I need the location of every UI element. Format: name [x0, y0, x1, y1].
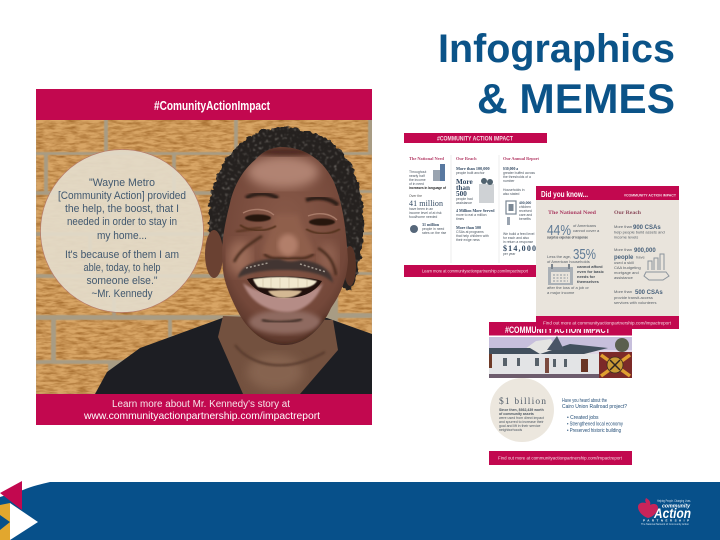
footer: Find out more at communityactionpartnership.com/impactreport: [543, 320, 672, 326]
quote circle: needed in order to stay in: [67, 216, 177, 228]
column: Our Reach: 900 CSAs: [633, 225, 661, 231]
column: The National Need: 35%: [573, 246, 596, 263]
header: [489, 322, 632, 336]
title: Infographics & MEMES: [438, 27, 675, 122]
column: The National Need: people in need: [422, 227, 444, 231]
icon: red apple mark: [638, 498, 658, 518]
column: The National Need: Less the age,: [547, 254, 571, 259]
column: The National Need: rates on the rise: [422, 231, 446, 235]
icon: small scale: [410, 225, 418, 233]
callout text: • Preserved historic building: [567, 428, 621, 434]
column: Our Reach: More than 500: [456, 225, 481, 230]
column: The National Need: of American households: [547, 259, 590, 264]
icon: corner triangles: [0, 481, 38, 540]
logo: Community Action Partnership: PARTNERSHIP: [643, 518, 689, 522]
column: Our Reach: More: [456, 178, 473, 186]
column: Our Reach: 900,000: [634, 248, 656, 254]
column: The National Need: 41 million: [409, 199, 443, 208]
column: The National Need: [547, 210, 605, 295]
column: Our Reach: CAA budgeting: [614, 265, 641, 270]
nose: [264, 218, 314, 260]
column: Our Annual Report: [503, 156, 540, 256]
face: [222, 147, 348, 345]
footer: [489, 451, 632, 465]
column: The National Need: The National Need: [548, 210, 597, 216]
logo: Community Action Partnership: The National Network of Community Action: [641, 522, 690, 526]
shirt: [95, 317, 372, 394]
column: Our Reach: income levels: [614, 234, 638, 240]
column: Our Annual Report: $14,000: [503, 244, 536, 253]
column: The National Need: even for basic: [577, 269, 605, 274]
callout text: Cairo Union Railroad project?: [562, 404, 627, 410]
quote circle: It's because of them I am: [65, 249, 179, 261]
column: Our Annual Report: children: [519, 205, 531, 209]
photo: smiling man against brick wall: [36, 119, 372, 394]
column: Our Annual Report: benefits: [519, 217, 531, 221]
infographic header: [404, 133, 547, 143]
folds: [234, 236, 262, 262]
quote circle: [40, 150, 204, 312]
column: Our Reach: people: [614, 255, 634, 261]
column: The National Need: after the loss of a job or: [547, 285, 589, 290]
column: Our Reach: services with volunteers: [614, 300, 656, 305]
column: The National Need: themselves: [577, 279, 600, 284]
column: Our Reach: mortgage and: [614, 270, 639, 275]
stat circle: goal and lift in their service: [499, 424, 540, 428]
column: Our Reach: times: [456, 217, 464, 221]
panel footer bar: www.communityactionpartnership.com/impactreport: [83, 411, 320, 422]
logo: Community Action Partnership: [638, 498, 691, 526]
column: The National Need: have been in an: [409, 207, 433, 211]
photo: railroad building: [489, 336, 632, 378]
teeth: [253, 277, 317, 289]
column: The National Need: Over the: [409, 194, 422, 198]
column: Our Reach: More than 100,000: [456, 166, 490, 171]
quote circle: ~Mr. Kennedy: [92, 288, 153, 300]
panel: Mr. Kennedy meme: [36, 89, 372, 425]
column: Our Reach: [456, 156, 495, 242]
column: The National Need: 44%: [547, 222, 571, 239]
logo: Community Action Partnership: community: [662, 504, 690, 510]
column: The National Need: 31 million: [422, 222, 440, 227]
panel footer bar: Learn more about Mr. Kennedy's story at: [112, 399, 290, 410]
column: The National Need: The National Need: [409, 156, 445, 161]
column: Our Reach: people built anchor: [456, 171, 486, 175]
infographic header: #COMMUNITY ACTION IMPACT: [437, 136, 513, 142]
column: Our Reach: people had: [456, 197, 473, 201]
column: Our Annual Report: We build a feed level: [503, 232, 535, 236]
chin: [249, 310, 321, 334]
header: #COMMUNITY ACTION IMPACT: [624, 194, 677, 198]
title: Infographics & MEMES: & MEMES: [477, 75, 675, 122]
stat circle: were used from direct impact: [499, 416, 544, 420]
column: Our Reach: 4 Million More Served: [456, 208, 495, 213]
column: Our Annual Report: $30,000 a: [503, 167, 518, 171]
column: Our Annual Report: number: [503, 179, 515, 183]
callout text: • Created jobs: [567, 415, 599, 421]
column: Our Reach: than: [456, 184, 470, 192]
quote circle: someone else.": [86, 275, 158, 287]
icon: hospital: [506, 201, 516, 225]
footer band: [0, 482, 720, 540]
column: Our Annual Report: in return a response: [503, 240, 533, 244]
column: Our Annual Report: received: [519, 209, 532, 213]
title: Infographics & MEMES: Infographics: [438, 27, 675, 71]
header: #COMMUNITY ACTION IMPACT: [505, 325, 610, 335]
column: Our Reach: more to eat a million: [456, 213, 487, 217]
hair: [209, 127, 363, 290]
column: The National Need: of Americans: [573, 223, 596, 228]
column: Our Annual Report: for each and also: [503, 236, 529, 240]
quote circle: "Wayne Metro: [89, 177, 155, 189]
header: Did you know...: [541, 190, 588, 199]
column: The National Need: the income: [409, 178, 426, 182]
column: Our Reach: assistance: [456, 201, 472, 205]
quote circle: able, today, to help: [84, 262, 161, 274]
column: Our Reach: used a skill: [614, 260, 634, 265]
white triangle: [10, 503, 38, 540]
logo: Community Action Partnership: Action: [653, 505, 691, 521]
stat circle: of community assets: [499, 412, 534, 416]
column: The National Need: needs for: [577, 274, 595, 279]
column: The National Need: [409, 156, 447, 235]
column: Our Annual Report: care and: [519, 213, 532, 217]
neck: [218, 316, 338, 394]
quote circle: my home...: [97, 230, 147, 242]
column: Our Annual Report: per year: [503, 252, 516, 256]
stat circle: $1 billion: [499, 396, 546, 407]
quote circle: the help, the boost, that I: [65, 203, 179, 215]
infographic footer: Learn more at communityactionpartnership.com/impactreport: [422, 268, 529, 274]
column: Our Reach: assistance: [614, 275, 634, 280]
column: Our Annual Report: also stated: [503, 192, 520, 196]
column: Our Annual Report: the thresholds of a: [503, 175, 531, 179]
column: Our Reach: Our Reach: [614, 210, 642, 216]
callout text: [562, 398, 627, 434]
icon: food bag: [479, 178, 494, 203]
column: The National Need: nearly half: [409, 174, 425, 178]
panel footer bar: [36, 394, 372, 425]
lower lip: [243, 283, 323, 312]
infographic footer: [404, 265, 547, 277]
column: Our Reach: [614, 210, 669, 305]
column: Our Reach: 500 CSAs: [635, 290, 663, 296]
stat circle: and spurred to increase their: [499, 420, 544, 424]
icon: calendar: [548, 264, 573, 285]
mouth: [247, 276, 322, 298]
column: Our Reach: More than: [614, 247, 632, 252]
column: The National Need: a major income: [547, 290, 575, 295]
panel: Did you know infographic: [536, 186, 679, 329]
column: Our Reach: More than: [614, 289, 632, 294]
gold chevron: [0, 503, 10, 540]
panel header bar: [36, 89, 372, 121]
stat circle: Since then, $932,439 worth: [499, 408, 544, 412]
column: The National Need: income level of at risk: [409, 211, 442, 215]
eyes: [245, 214, 271, 222]
stat circle: neighborhoods: [499, 428, 522, 432]
column: Our Reach: Our Reach: [456, 156, 477, 161]
column: The National Need: Throughout: [409, 170, 426, 174]
column: Our Annual Report: Households in: [503, 188, 525, 192]
column: Our Reach: their exige ness: [456, 238, 480, 242]
column: The National Need: surprise expense of response: [547, 234, 589, 240]
stat circle: [490, 378, 554, 442]
column: Our Reach: 500: [456, 190, 467, 198]
panel: Community Action Impact infographic: [404, 133, 547, 277]
callout text: Have you heard about the: [562, 398, 607, 404]
column: Our Reach: provide transit-access: [614, 295, 653, 300]
column: The National Need: food/home needed: [409, 215, 437, 219]
quote circle: [Community Action] provided: [58, 190, 186, 202]
column: Our Reach: CSAs at programs: [456, 230, 484, 234]
column: The National Need: of in need: [409, 182, 424, 186]
logo: Community Action Partnership: Helping People. Changing Lives.: [657, 499, 691, 503]
crimson triangle: [0, 481, 22, 510]
column: Our Annual Report: greater buffed across: [503, 171, 535, 175]
icon: hand with bars: [644, 254, 669, 280]
header: [536, 186, 679, 200]
panel: Cairo Union Railroad infographic: [489, 322, 632, 465]
column: Our Annual Report: Our Annual Report: [503, 156, 540, 161]
ears: [205, 230, 223, 278]
column: Our Reach: have: [636, 254, 645, 260]
column: Our Annual Report: 400,000: [519, 201, 531, 205]
footer: [536, 316, 679, 329]
column: Our Reach: help people build assets and: [614, 230, 665, 234]
eyebrows: [246, 194, 278, 198]
panel header bar: #ComunityActionImpact: [154, 98, 271, 113]
callout text: • Strengthened local economy: [567, 422, 623, 428]
column: The National Need: cannot cover a: [573, 228, 600, 233]
footer: Find out more at communityactionpartnership.com/impactreport: [498, 456, 623, 460]
column: The National Need: increases in language of: [409, 186, 447, 190]
column: Our Reach: More than: [614, 224, 632, 229]
column: The National Need: cannot afford: [577, 264, 603, 269]
moustache: [238, 259, 333, 283]
column: Our Reach: that help children with: [456, 234, 489, 238]
